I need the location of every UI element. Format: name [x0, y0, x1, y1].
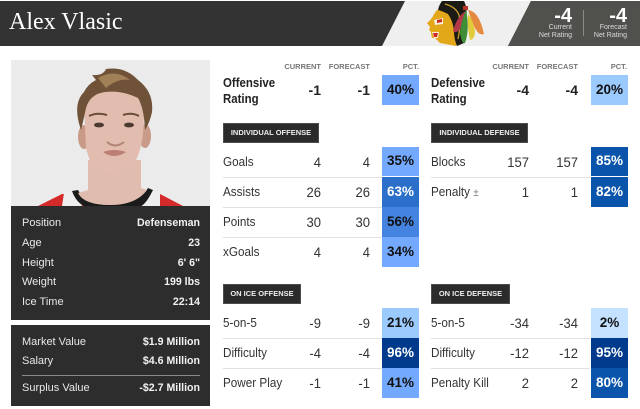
bio: ice time: 22:14	[173, 296, 200, 308]
column headers: offense	[284, 62, 419, 71]
table: on ice defense: 80%	[596, 375, 623, 390]
table: individual offense: 4	[363, 244, 370, 260]
title: player name: Alex Vlasic	[9, 9, 123, 35]
contract: salary	[22, 355, 200, 367]
defensive rating: -4	[566, 82, 578, 98]
heading: individual offense	[223, 123, 319, 143]
table: individual offense: 26	[307, 184, 321, 200]
table: individual defense	[431, 147, 628, 207]
table: on ice defense: 2	[522, 375, 529, 391]
table: on ice offense: -4	[309, 345, 321, 361]
table: individual defense: 1	[522, 184, 529, 200]
contract: market value: $1.9 Million	[143, 336, 200, 348]
table: individual offense: 4	[314, 244, 321, 260]
table: on ice defense: Difficulty	[431, 345, 475, 360]
panel: contract value	[11, 325, 210, 406]
table: individual defense: 157	[507, 154, 529, 170]
offensive rating: Offensive	[223, 75, 275, 90]
defensive rating	[431, 75, 628, 106]
bio: height: 6' 6"	[178, 257, 200, 269]
table: on ice offense: -9	[309, 315, 321, 331]
table: on ice offense: 21%	[387, 315, 414, 330]
table: individual offense: 4	[314, 154, 321, 170]
offensive rating: -1	[309, 82, 321, 98]
forecast net rating: Net Rating	[594, 32, 627, 39]
contract: salary: $4.6 Million	[143, 355, 200, 367]
player photo	[11, 60, 210, 206]
defensive rating: Defensive	[431, 75, 485, 90]
table: on ice offense: -9	[358, 315, 370, 331]
column headers: defense: PCT.	[611, 62, 627, 71]
table: individual defense: Penalty ±	[431, 184, 479, 199]
heading: individual offense: INDIVIDUAL OFFENSE	[231, 128, 311, 137]
offensive rating: -1	[358, 82, 370, 98]
table: on ice defense: 2	[571, 375, 578, 391]
table: on ice defense: -34	[559, 315, 578, 331]
table: individual offense: Points	[223, 214, 256, 229]
table: on ice defense: 95%	[596, 345, 623, 360]
bio: height	[22, 257, 200, 269]
bio: height: Height	[22, 257, 54, 269]
column headers: offense: FORECAST	[329, 62, 370, 71]
defensive rating: Rating	[431, 90, 467, 106]
forecast net rating: Forecast	[600, 24, 627, 31]
defensive rating: -4	[517, 82, 529, 98]
table: individual defense: 157	[556, 154, 578, 170]
table: on ice offense: Power Play	[223, 375, 282, 390]
table: on ice defense: -12	[510, 345, 529, 361]
table: on ice offense: -1	[358, 375, 370, 391]
table: on ice defense: -34	[510, 315, 529, 331]
header band	[0, 1, 640, 46]
contract: salary: Salary	[22, 355, 53, 367]
heading: on ice defense	[431, 284, 510, 304]
contract: surplus value: -$2.7 Million	[139, 382, 200, 394]
column headers: defense: FORECAST	[537, 62, 578, 71]
bio: position: Defenseman	[137, 217, 200, 229]
icon: Chicago Blackhawks logo	[427, 1, 484, 46]
contract: surplus value: Surplus Value	[22, 382, 90, 394]
defensive rating: 20%	[596, 82, 623, 97]
heading: on ice offense	[223, 284, 301, 304]
table: individual offense: 63%	[387, 184, 414, 199]
heading: individual defense: INDIVIDUAL DEFENSE	[439, 128, 520, 137]
heading: on ice offense: ON ICE OFFENSE	[230, 289, 294, 298]
table: on ice offense: 96%	[387, 345, 414, 360]
table: individual offense: 30	[356, 214, 370, 230]
bio: age: 23	[188, 237, 200, 249]
offensive rating: Rating	[223, 90, 259, 106]
table: individual offense: 35%	[387, 153, 414, 168]
table: individual offense	[223, 147, 419, 267]
current net rating: Net Rating	[539, 32, 572, 39]
contract: market value: Market Value	[22, 336, 86, 348]
heading: individual defense	[431, 123, 528, 143]
bio: weight: 199 lbs	[164, 276, 200, 288]
table: on ice defense	[431, 308, 628, 398]
table: individual defense: Blocks	[431, 154, 465, 169]
table: on ice offense: 41%	[387, 375, 414, 390]
table: individual offense: 4	[363, 154, 370, 170]
table: individual offense: 26	[356, 184, 370, 200]
column headers: defense	[492, 62, 627, 71]
bio: weight: Weight	[22, 276, 56, 288]
table: individual defense: 1	[571, 184, 578, 200]
table: on ice offense	[223, 308, 419, 398]
column headers: defense: CURRENT	[492, 62, 529, 71]
table: individual offense: xGoals	[223, 244, 259, 259]
column headers: offense: PCT.	[403, 62, 419, 71]
table: on ice offense: -1	[309, 375, 321, 391]
heading: on ice defense: ON ICE DEFENSE	[439, 289, 502, 298]
table: on ice defense: 2%	[600, 315, 619, 330]
offensive rating	[223, 75, 419, 106]
column headers: offense: CURRENT	[284, 62, 321, 71]
panel: player bio	[11, 206, 210, 320]
current net rating: -4	[554, 5, 572, 27]
bio: age: Age	[22, 237, 42, 249]
table: individual offense: Goals	[223, 154, 254, 169]
bio: ice time: Ice Time	[22, 296, 64, 308]
forecast net rating: -4	[609, 5, 627, 27]
table: on ice defense: -12	[559, 345, 578, 361]
bio: position	[22, 217, 200, 229]
current net rating	[539, 5, 572, 39]
forecast net rating	[594, 5, 627, 39]
table: on ice defense: 5-on-5	[431, 315, 465, 330]
bio: weight	[22, 276, 200, 288]
table: individual offense: 34%	[387, 244, 414, 259]
table: on ice offense: 5-on-5	[223, 315, 257, 330]
table: individual offense: 30	[307, 214, 321, 230]
bio: ice time	[22, 296, 200, 308]
table: on ice defense: Penalty Kill	[431, 375, 489, 390]
bio: position: Position	[22, 217, 61, 229]
contract: surplus value	[22, 382, 200, 394]
current net rating: Current	[549, 24, 572, 31]
offensive rating: 40%	[387, 82, 414, 97]
contract: market value	[22, 336, 200, 348]
table: individual offense: 56%	[387, 214, 414, 229]
table: on ice offense: Difficulty	[223, 345, 267, 360]
table: individual defense: 85%	[596, 153, 623, 168]
bio: age	[22, 237, 200, 249]
table: individual defense: 82%	[596, 184, 623, 199]
table: on ice offense: -4	[358, 345, 370, 361]
table: individual offense: Assists	[223, 184, 260, 199]
